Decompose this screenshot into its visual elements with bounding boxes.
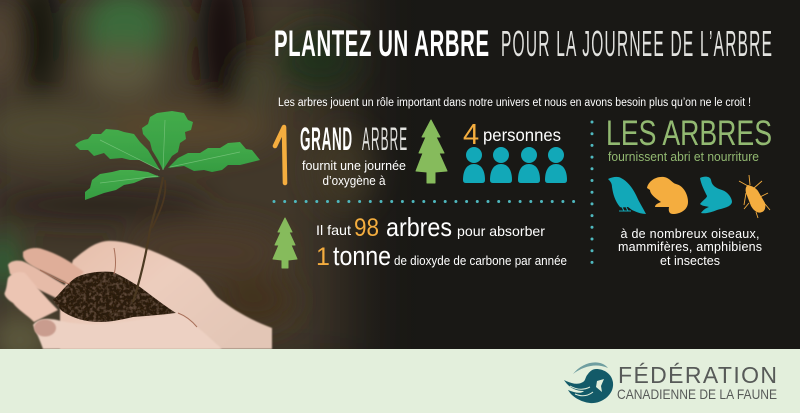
vertical dotted divider [590, 122, 594, 274]
icons: animals [608, 175, 770, 218]
title [274, 24, 772, 65]
stat: 1 grand arbre [275, 122, 407, 188]
wordmark: FÉDÉRATION [618, 362, 777, 388]
stat: 4 personnes: personnes [483, 125, 561, 145]
stat: 1 tonne: 1 [316, 243, 330, 271]
footer band [0, 349, 800, 413]
back of hand and wrist [60, 241, 272, 349]
icon: four people [463, 147, 567, 183]
stat: 98 arbres [316, 212, 545, 242]
soil [53, 272, 176, 322]
finger three [5, 272, 58, 322]
stat: 98 arbres: Il faut [316, 222, 351, 238]
photo: hands holding soil and seedling [5, 111, 272, 349]
finger one [23, 248, 84, 284]
logo: fédération canadienne de la faune: CANADIENNE DE LA FAUNE [617, 386, 777, 402]
heading: les arbres [606, 114, 772, 164]
stat: 4 personnes: 4 [463, 119, 479, 151]
stem [133, 177, 163, 302]
seedling leaves [75, 111, 260, 200]
stat: 98 arbres: pour absorber [457, 223, 545, 239]
oxygen text: fournit une journée [302, 159, 406, 173]
animals text: mammifères, amphibiens [618, 240, 762, 254]
stat: 4 personnes [463, 119, 561, 151]
animals text: et insectes [660, 254, 720, 268]
icon: bird emblem [564, 362, 613, 403]
grand arbre heading: ARBRE [362, 122, 407, 158]
oxygen text: d’oxygène à [322, 174, 386, 188]
horizontal dotted divider [274, 200, 574, 203]
finger two [8, 261, 68, 298]
stat: 98 arbres: arbres [386, 212, 452, 242]
lower palm and thumb [33, 313, 222, 349]
icon: rodent [647, 177, 688, 214]
stat: 1 tonne: de dioxyde de carbone par année [394, 254, 567, 268]
title: PLANTEZ UN ARBRE [274, 24, 489, 65]
grand arbre heading [300, 122, 407, 158]
icon: small tree [273, 218, 297, 268]
numeral 1 [275, 127, 285, 183]
animals text: à de nombreux oiseaux, [620, 227, 760, 241]
icon: frog [700, 177, 732, 213]
thumbnail [34, 320, 56, 336]
oxygen text [302, 159, 406, 188]
icon: insect [739, 175, 770, 218]
shadow crease [40, 248, 197, 327]
animals text [618, 227, 762, 268]
grand arbre heading: GRAND [300, 123, 352, 158]
icon: large tree [416, 120, 447, 183]
heading: les arbres: fournissent abri et nourriture [608, 150, 759, 164]
icon: bird [608, 177, 646, 214]
stat: 98 arbres: 98 [354, 214, 379, 242]
title: POUR LA JOURNEE DE L’ARBRE [501, 24, 772, 64]
stat: 1 tonne [316, 241, 567, 271]
intro text: Les arbres jouent un rôle important dans notre univers et nous en avons besoin plus qu’on ne le croit ! [278, 97, 751, 109]
stat: 1 tonne: tonne [333, 241, 391, 271]
logo: fédération canadienne de la faune [564, 362, 777, 403]
